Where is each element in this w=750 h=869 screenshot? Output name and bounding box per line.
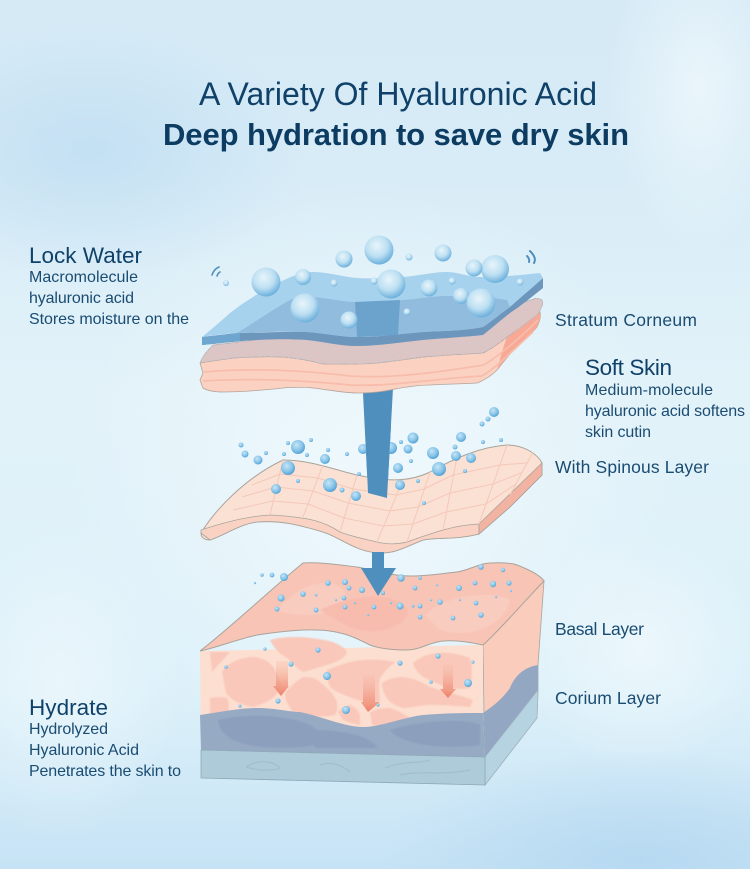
label: basal layer: Basal Layer	[555, 619, 644, 639]
blue plate inner shadow	[237, 296, 510, 337]
skin layer: spinous sheet	[201, 445, 542, 553]
text block: lock water: Lock Water	[29, 243, 142, 268]
text block: lock water: Macromolecule	[29, 269, 138, 286]
lower pink dermis band	[200, 312, 540, 393]
blue plate front edge	[202, 278, 543, 346]
label: corium layer: Corium Layer	[555, 688, 661, 708]
text block: soft skin: Soft Skin	[585, 355, 672, 380]
title: A Variety Of Hyaluronic Acid	[199, 76, 597, 112]
blue plate top	[202, 272, 543, 337]
text block: soft skin: hyaluronic acid softens	[585, 403, 745, 420]
arrow shaft overlay on sheet	[365, 425, 391, 498]
blue corium band	[200, 708, 485, 757]
skin layer: basal cube	[200, 563, 544, 785]
right edge shading	[497, 312, 540, 370]
sand textured band	[200, 298, 543, 364]
text block: hydrate: Hydrolyzed	[29, 721, 108, 738]
title	[163, 76, 629, 152]
cube top	[200, 563, 544, 651]
large water bubbles	[223, 236, 524, 328]
arrow shaft: upper	[363, 388, 393, 498]
cube front	[200, 645, 485, 757]
water droplets inside cube	[224, 647, 475, 714]
text block: hydrate: Hydrate	[29, 695, 108, 720]
skin layer: stratum corneum stack	[200, 272, 543, 393]
text block: hydrate: Hyaluronic Acid	[29, 742, 139, 759]
icon: water ripple marks	[212, 251, 535, 276]
text block: soft skin: skin cutin	[585, 424, 651, 441]
small water droplets on cube	[254, 564, 512, 620]
text block: lock water: Stores moisture on the	[29, 311, 189, 328]
arrow shaft: inside plate	[355, 300, 400, 337]
text block: hydrate	[29, 695, 181, 780]
title: Deep hydration to save dry skin	[163, 117, 629, 152]
arrow: large blue downward	[361, 552, 396, 596]
label: stratum corneum: Stratum Corneum	[555, 310, 697, 330]
text block: lock water: hyaluronic acid	[29, 290, 134, 307]
medium water bubbles	[238, 407, 503, 505]
pink arrows	[273, 661, 456, 712]
text block: hydrate: Penetrates the skin to	[29, 763, 181, 780]
cube right side	[483, 581, 544, 785]
text block: soft skin: Medium-molecule	[585, 382, 713, 399]
text block: lock water	[29, 243, 189, 328]
label: spinous layer: With Spinous Layer	[555, 457, 709, 477]
lower plate	[201, 750, 485, 785]
text block: soft skin	[585, 355, 745, 441]
